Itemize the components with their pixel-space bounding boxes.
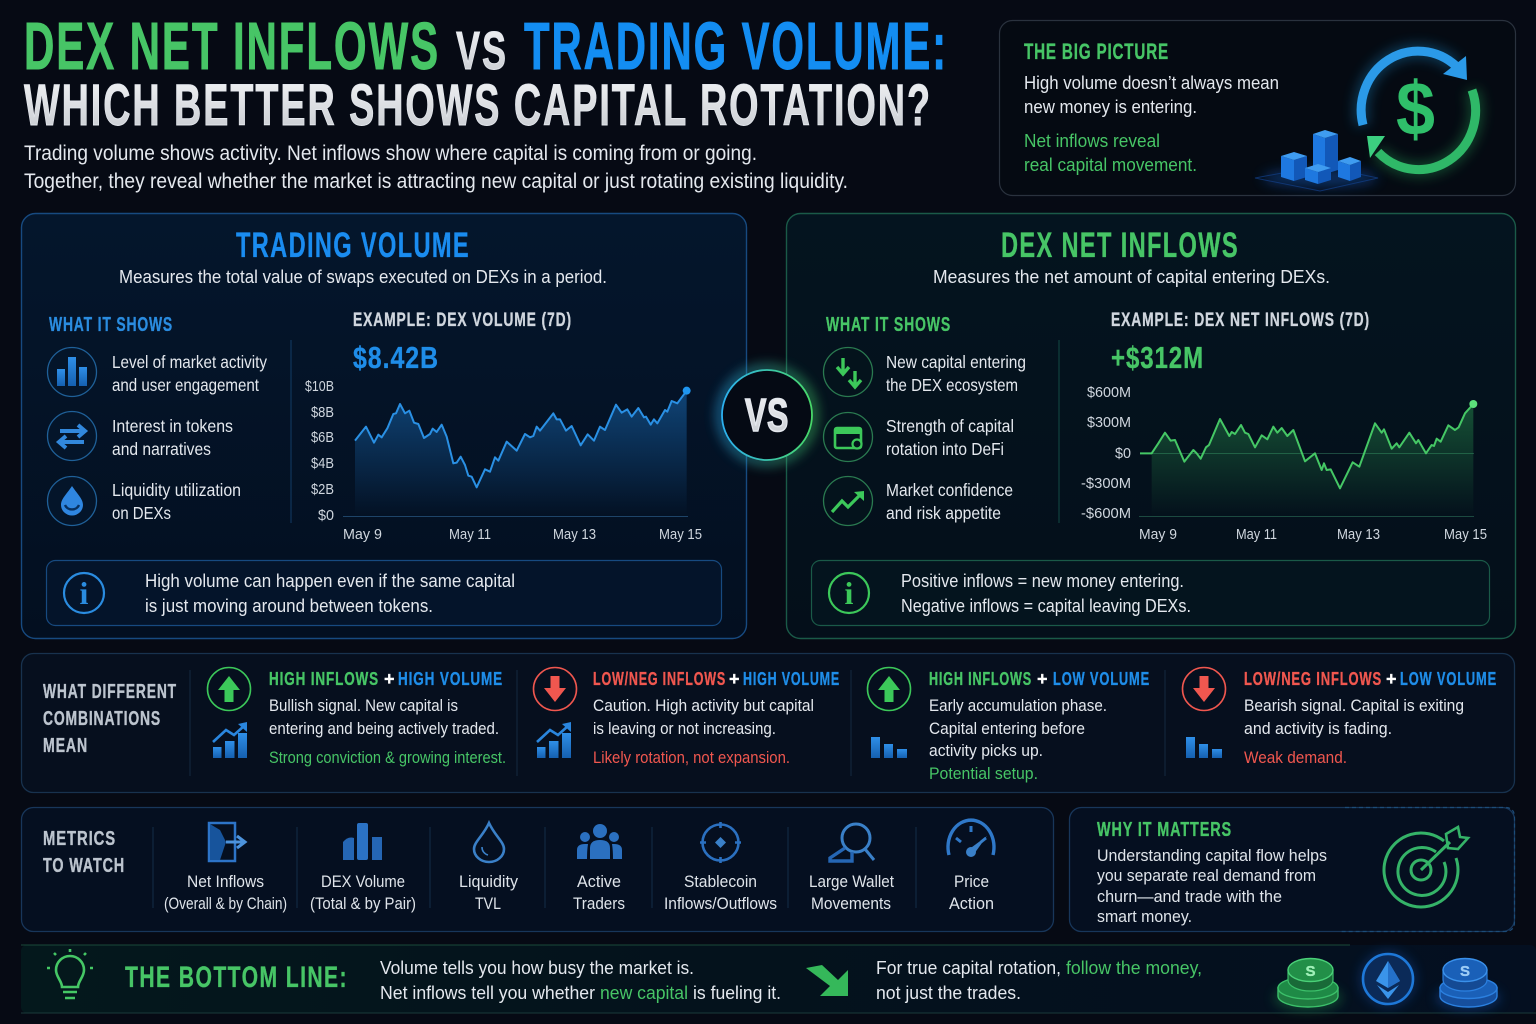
metric: dex volume: DEX Volume (321, 873, 405, 891)
why it matters text: you separate real demand from (1097, 867, 1316, 885)
chart: dex volume: May 11 (449, 527, 491, 543)
metric: stablecoin flows (664, 822, 777, 913)
item: capital strength: rotation into DeFi (886, 439, 1004, 459)
icon: magnifier wallet (830, 824, 874, 861)
chart: dex net inflows: May 13 (1337, 527, 1380, 543)
item: capital strength: Strength of capital (886, 416, 1014, 436)
title: VS (456, 21, 508, 81)
intro text: Trading volume shows activity. Net inflows show where capital is coming from or going. (24, 141, 757, 165)
item: new capital (886, 352, 1026, 395)
bottom line text: volume: is fueling it. (693, 983, 781, 1003)
metric: price action (948, 820, 994, 913)
icon: bars (343, 823, 382, 860)
combination: low inflows low volume (1182, 668, 1497, 767)
icon: people (577, 824, 622, 859)
panel: what different combinations mean (22, 654, 1514, 792)
item: token interest (112, 416, 233, 459)
callout: volume note (46, 560, 722, 626)
combination: high inflows low volume: HIGH INFLOWS (929, 668, 1032, 689)
item: market confidence: and risk appetite (886, 503, 1001, 523)
why it matters text: churn—and trade with the (1097, 888, 1282, 906)
icon: circular target (700, 822, 741, 863)
value: 312M: +$312M (1111, 340, 1204, 375)
title (24, 9, 948, 138)
chart: dex net inflows: $0 (1115, 445, 1131, 462)
combination: high inflows low volume: Capital entering before (929, 719, 1085, 738)
chart: dex volume: $4B (311, 455, 334, 472)
icon: blue coins (1436, 958, 1500, 1009)
combination: high inflows low volume: + (1037, 669, 1049, 689)
combination: high inflows high volume: + (384, 669, 396, 689)
chart: dex net inflows: May 15 (1444, 527, 1487, 543)
icon: down arrow (1182, 668, 1226, 710)
icon: confidence trend (824, 476, 872, 526)
callout: inflows note: Positive inflows = new money entering. (901, 571, 1184, 591)
combination: high inflows high volume: entering and being actively traded. (269, 719, 499, 738)
chart: dex net inflows: May 9 (1139, 527, 1177, 543)
big picture text: real capital movement. (1024, 155, 1197, 175)
bottom line text: follow the money: For true capital rotation, (876, 958, 1061, 978)
title: DEX NET INFLOWS (24, 9, 440, 84)
combination: low inflows high volume: Caution. High activity but capital (593, 696, 814, 715)
callout: inflows note: Negative inflows = capital leaving DEXs. (901, 596, 1191, 616)
item: market activity (112, 352, 267, 395)
combination: high inflows low volume: activity picks up. (929, 741, 1043, 760)
item: market confidence (886, 480, 1013, 523)
combination: low inflows low volume: LOW VOLUME (1400, 668, 1497, 689)
big picture text (1024, 73, 1279, 175)
metrics heading: TO WATCH (43, 855, 125, 877)
icon: gauge (948, 820, 994, 857)
metric: stablecoin flows: Inflows/Outflows (664, 895, 777, 913)
callout: volume note: High volume can happen even if the same capital (145, 571, 515, 591)
item: market activity: Level of market activity (112, 352, 267, 372)
combination: high inflows high volume (208, 668, 506, 767)
callout: inflows note (812, 560, 1490, 626)
combination: low inflows low volume: Weak demand. (1244, 748, 1347, 767)
value: 8.42B: $8.42B (353, 340, 439, 375)
chart: dex volume: May 9 (343, 527, 382, 543)
what it shows heading: WHAT IT SHOWS (826, 314, 951, 336)
vs badge (721, 369, 813, 461)
bottom line text: follow the money (876, 958, 1202, 1003)
chart: dex volume (305, 378, 702, 543)
big picture text: new money is entering. (1024, 97, 1197, 117)
big picture text: Net inflows reveal (1024, 131, 1160, 151)
icon: swap arrows (48, 412, 96, 460)
big picture text: High volume doesn’t always mean (1024, 73, 1279, 93)
chart heading: dex net inflows: EXAMPLE: DEX NET INFLOWS (7D) (1111, 310, 1370, 331)
panel: the bottom line (21, 945, 1536, 1013)
combination: high inflows low volume (868, 668, 1150, 783)
bottom line text: volume: new capital (600, 983, 688, 1003)
chart: dex net inflows: -$300M (1081, 475, 1131, 492)
metric: price action: Action (949, 895, 994, 913)
chart: dex volume: $6B (311, 429, 334, 446)
metric: large wallet movements: Movements (811, 895, 891, 913)
combination: low inflows low volume: LOW/NEG INFLOWS (1244, 668, 1382, 689)
bottom line text: volume (380, 958, 781, 1003)
icon: rising bars (213, 722, 247, 758)
bottom line text: follow the money: not just the trades. (876, 983, 1021, 1003)
combination: low inflows low volume: and activity is fading. (1244, 719, 1392, 738)
icon: diagonal arrow (806, 965, 848, 996)
item: capital strength (886, 416, 1014, 459)
item: new capital: the DEX ecosystem (886, 375, 1018, 395)
icon: capital rotation arrows with bars: $ (1396, 67, 1435, 152)
title: TRADING VOLUME: (524, 9, 948, 84)
why it matters heading: WHY IT MATTERS (1097, 819, 1232, 841)
chart: dex net inflows (1081, 384, 1487, 543)
combination: high inflows high volume: Strong conviction & growing interest. (269, 748, 506, 767)
metric: dex volume (310, 823, 416, 913)
chart: dex net inflows: $300M (1087, 414, 1131, 431)
icon: down arrow (534, 668, 576, 710)
bottom line heading: THE BOTTOM LINE: (125, 961, 348, 994)
icon: falling bars (1186, 737, 1222, 758)
chart: dex net inflows: May 11 (1236, 527, 1277, 543)
title: WHICH BETTER SHOWS CAPITAL ROTATION? (24, 73, 932, 138)
combinations heading (43, 681, 177, 757)
item: market activity: and user engagement (112, 375, 259, 395)
metrics heading (43, 828, 125, 877)
net inflows description: Measures the net amount of capital entering DEXs. (933, 267, 1330, 287)
metric: active traders (573, 824, 625, 913)
combination: high inflows high volume: HIGH VOLUME (398, 668, 503, 689)
combinations heading: WHAT DIFFERENT (43, 681, 177, 703)
icon: capital rotation arrows with bars (1255, 51, 1476, 191)
icon: ethereum coin (1360, 951, 1416, 1007)
metric: net inflows: (Overall & by Chain) (164, 895, 287, 913)
icon: up arrow (208, 668, 250, 710)
item: market confidence: Market confidence (886, 480, 1013, 500)
combination: low inflows low volume: Bearish signal. Capital is exiting (1244, 696, 1464, 715)
combinations heading: COMBINATIONS (43, 708, 161, 730)
intro text: Together, they reveal whether the market is attracting new capital or just rotating existing liquidity. (24, 169, 848, 193)
intro text (24, 141, 848, 193)
item: token interest: and narratives (112, 439, 211, 459)
metric: liquidity tvl: Liquidity (459, 873, 519, 891)
vs badge: VS (745, 389, 789, 441)
icon: green coins (1274, 958, 1342, 1010)
metric: stablecoin flows: Stablecoin (684, 873, 757, 891)
combination: high inflows low volume: LOW VOLUME (1053, 668, 1150, 689)
combination: high inflows high volume: HIGH INFLOWS (269, 668, 379, 689)
what it shows heading: WHAT IT SHOWS (49, 314, 173, 336)
chart: dex volume: $2B (311, 481, 334, 498)
icon: info (829, 573, 869, 613)
combination: low inflows high volume: LOW/NEG INFLOWS (593, 668, 726, 689)
combination: low inflows high volume: is leaving or not increasing. (593, 719, 776, 738)
big picture heading: THE BIG PICTURE (1024, 39, 1169, 64)
icon: light bulb (47, 949, 93, 998)
item: liquidity utilization: on DEXs (112, 503, 171, 523)
combination: low inflows low volume: + (1386, 669, 1398, 689)
chart heading: dex volume: EXAMPLE: DEX VOLUME (7D) (353, 310, 572, 331)
panel: the big picture (1000, 20, 1516, 196)
chart: dex net inflows: $600M (1087, 384, 1131, 401)
trading volume heading: TRADING VOLUME (236, 226, 470, 265)
combination: low inflows high volume (534, 668, 840, 767)
combination: low inflows high volume: + (729, 669, 741, 689)
bottom line text: volume: Net inflows tell you whether (380, 983, 595, 1003)
icon: green coins: S (1305, 963, 1316, 980)
icon: info: i (80, 575, 89, 611)
chart: dex volume: $10B (305, 378, 334, 395)
metric: price action: Price (954, 873, 989, 891)
panel: dex net inflows (786, 214, 1516, 638)
metric: large wallet movements (809, 824, 894, 913)
panel: metrics to watch (22, 808, 1054, 932)
chart: dex volume: May 13 (553, 527, 596, 543)
combination: low inflows high volume: HIGH VOLUME (743, 668, 840, 689)
combination: low inflows high volume: Likely rotation, not expansion. (593, 748, 790, 767)
panel: why it matters (1070, 808, 1514, 932)
metric: liquidity tvl: TVL (475, 895, 501, 913)
metric: active traders: Traders (573, 895, 625, 913)
why it matters text: smart money. (1097, 908, 1192, 926)
why it matters text: Understanding capital flow helps (1097, 847, 1327, 865)
icon: liquidity drop (48, 476, 96, 526)
combinations heading: MEAN (43, 735, 88, 757)
metrics heading: METRICS (43, 828, 116, 850)
item: liquidity utilization: Liquidity utilization (112, 480, 241, 500)
metric: dex volume: (Total & by Pair) (310, 895, 416, 913)
icon: wallet rotation (824, 412, 872, 462)
metric: active traders: Active (577, 873, 621, 891)
chart: dex volume: $0 (318, 507, 334, 524)
chart: dex net inflows: -$600M (1081, 505, 1131, 522)
combination: high inflows low volume: Potential setup. (929, 764, 1038, 783)
icon: door with arrow (209, 823, 245, 861)
icon: info: i (845, 575, 854, 611)
metric: net inflows: Net Inflows (187, 873, 264, 891)
icon: target with arrow (1384, 827, 1468, 907)
icon: up arrow (868, 668, 910, 710)
chart: dex volume: $8B (311, 404, 334, 421)
icon: info (64, 573, 104, 613)
metric: large wallet movements: Large Wallet (809, 873, 894, 891)
cubes (1281, 130, 1361, 184)
combination: high inflows low volume: Early accumulation phase. (929, 696, 1107, 715)
why it matters text (1097, 847, 1327, 926)
bottom line text: follow the money: follow the money, (1066, 958, 1202, 978)
icon: blue coins: S (1460, 963, 1470, 980)
trading volume description: Measures the total value of swaps executed on DEXs in a period. (119, 267, 607, 287)
icon: capital entering arrows (824, 348, 872, 396)
chart: dex volume: May 15 (659, 527, 702, 543)
combination: high inflows high volume: Bullish signal. New capital is (269, 696, 458, 715)
icon: falling bars (871, 737, 907, 758)
panel: trading volume (22, 214, 746, 638)
icon: drop (474, 823, 504, 862)
icon: rising bars (537, 722, 571, 758)
metric: liquidity tvl (459, 823, 519, 913)
callout: volume note: is just moving around between tokens. (145, 596, 433, 616)
item: token interest: Interest in tokens (112, 416, 233, 436)
item: new capital: New capital entering (886, 352, 1026, 372)
net inflows heading: DEX NET INFLOWS (1001, 226, 1239, 265)
bottom line text: volume: Volume tells you how busy the market is. (380, 958, 694, 978)
item: liquidity utilization (112, 480, 241, 523)
metric: net inflows (164, 823, 287, 913)
icon: market activity bars (48, 348, 96, 396)
